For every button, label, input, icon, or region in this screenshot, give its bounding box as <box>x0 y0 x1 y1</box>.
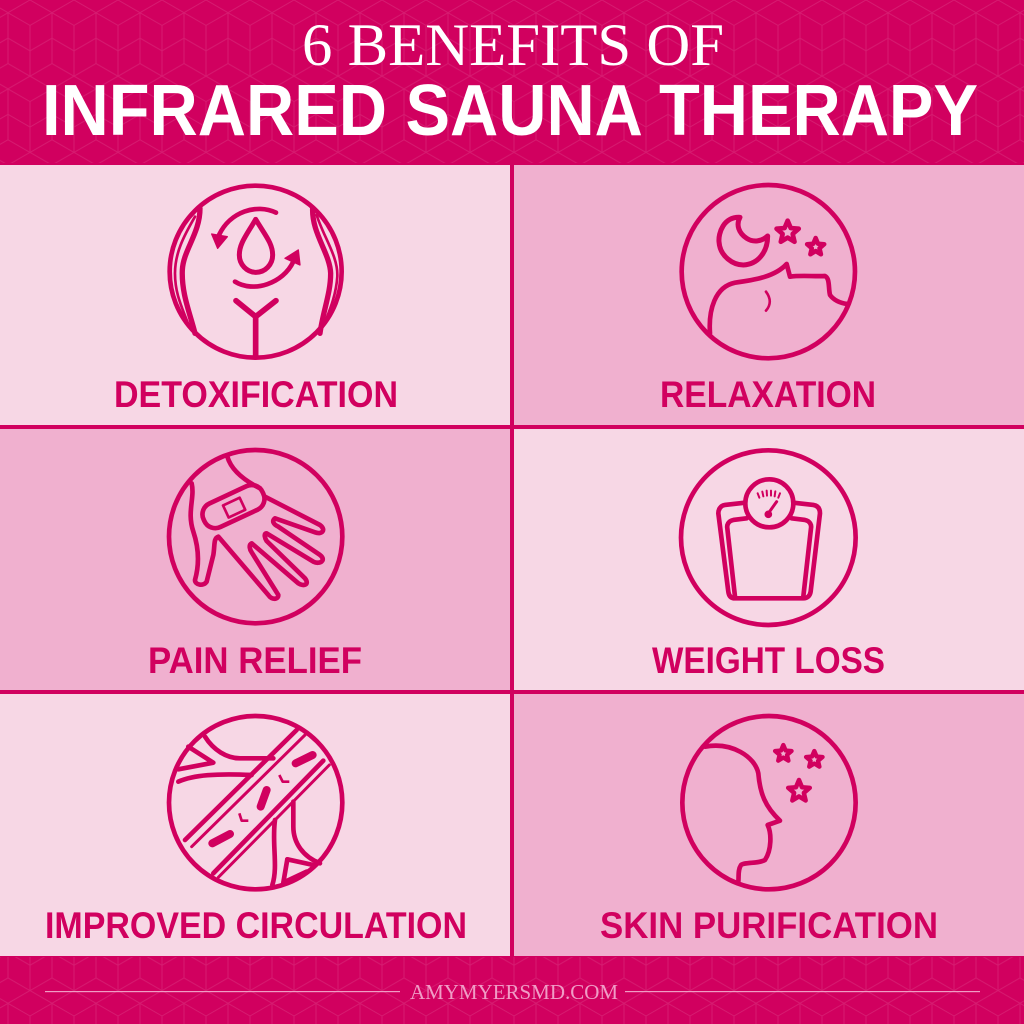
panel: pain relief <box>0 429 510 690</box>
title: 6 BENEFITS OF <box>302 12 724 78</box>
label: skin purification: SKIN PURIFICATION <box>600 905 938 946</box>
footer website line: AMYMYERSMD.COM <box>410 980 618 1004</box>
label: pain relief: PAIN RELIEF <box>148 640 362 681</box>
icon: sleeping face with moon and stars <box>682 185 855 358</box>
panel: relaxation <box>514 165 1024 425</box>
label: improved circulation: IMPROVED CIRCULATION <box>45 905 467 946</box>
panel: skin purification <box>514 694 1024 956</box>
panel: improved circulation <box>0 694 510 956</box>
icon: body with water drop <box>170 186 342 358</box>
title: INFRARED SAUNA THERAPY <box>42 71 978 151</box>
header pattern <box>0 0 1024 163</box>
panel: detoxification <box>0 165 510 425</box>
icon: hand with bandage <box>169 450 342 623</box>
panel: weight loss <box>514 429 1024 690</box>
footer pattern <box>0 957 1024 1024</box>
label: relaxation: RELAXATION <box>660 374 876 415</box>
label: detoxification: DETOXIFICATION <box>114 374 398 415</box>
title <box>42 12 978 151</box>
icon: blood vessel <box>169 716 342 889</box>
icon: face profile with stars <box>682 716 856 889</box>
icon: bathroom scale <box>681 450 856 625</box>
label: weight loss: WEIGHT LOSS <box>652 640 885 681</box>
